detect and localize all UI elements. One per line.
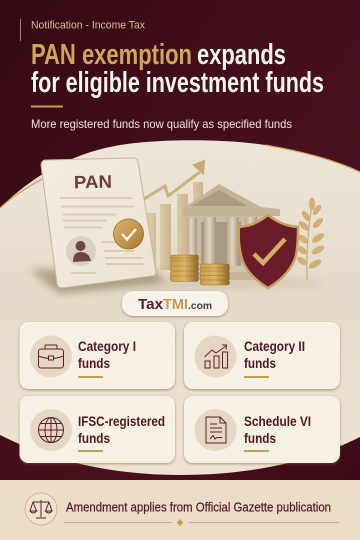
- card: Category II: [184, 322, 340, 389]
- title rule: [31, 106, 63, 108]
- card: IFSC-registered: [20, 396, 175, 463]
- subtitle: More registered funds now qualify as specified funds: [31, 117, 292, 131]
- PAN document: PAN: [74, 172, 112, 192]
- header accent line: [20, 19, 21, 41]
- card: Schedule VI: [184, 396, 340, 463]
- title: PAN exemption: [31, 39, 192, 71]
- kicker: Notification - Income Tax: [31, 20, 146, 32]
- cream central panel: [0, 140, 360, 475]
- document shadow: [30, 266, 165, 294]
- card: Schedule VI: Schedule VI: [244, 413, 311, 429]
- card: Category I: Category I: [78, 338, 136, 354]
- card: Category II: Category II: [244, 338, 305, 354]
- shield: [239, 215, 298, 288]
- laurel sprig: [295, 198, 326, 280]
- title: expands: [197, 39, 286, 71]
- icon: briefcase: [38, 345, 64, 368]
- card: IFSC-registered: IFSC-registered: [78, 413, 165, 429]
- card: IFSC-registered: funds: [78, 430, 110, 446]
- icon: document: [206, 417, 226, 443]
- TaxTMI logo pill: TMI: [163, 296, 188, 313]
- card: Schedule VI: funds: [244, 430, 276, 446]
- card: Category I: funds: [78, 355, 110, 371]
- footer band: [0, 480, 360, 540]
- TaxTMI logo pill: Tax: [138, 296, 164, 313]
- card: Category II: funds: [244, 355, 276, 371]
- TaxTMI logo pill: [122, 291, 228, 316]
- icon: globe: [38, 418, 64, 442]
- icon: scales of justice: [25, 493, 57, 525]
- gold check seal: [114, 219, 144, 249]
- growth chart: [144, 161, 204, 273]
- avatar: [66, 236, 96, 266]
- TaxTMI logo pill: .com: [188, 301, 212, 312]
- icon: growth chart: [204, 345, 228, 368]
- PAN document: [41, 158, 156, 288]
- illustration: [30, 158, 326, 294]
- card: Category I: [20, 322, 175, 389]
- coin stacks: [170, 255, 230, 285]
- bank building: [170, 184, 280, 280]
- footer band: Amendment applies from Official Gazette publication: [66, 500, 331, 514]
- title: [31, 39, 324, 99]
